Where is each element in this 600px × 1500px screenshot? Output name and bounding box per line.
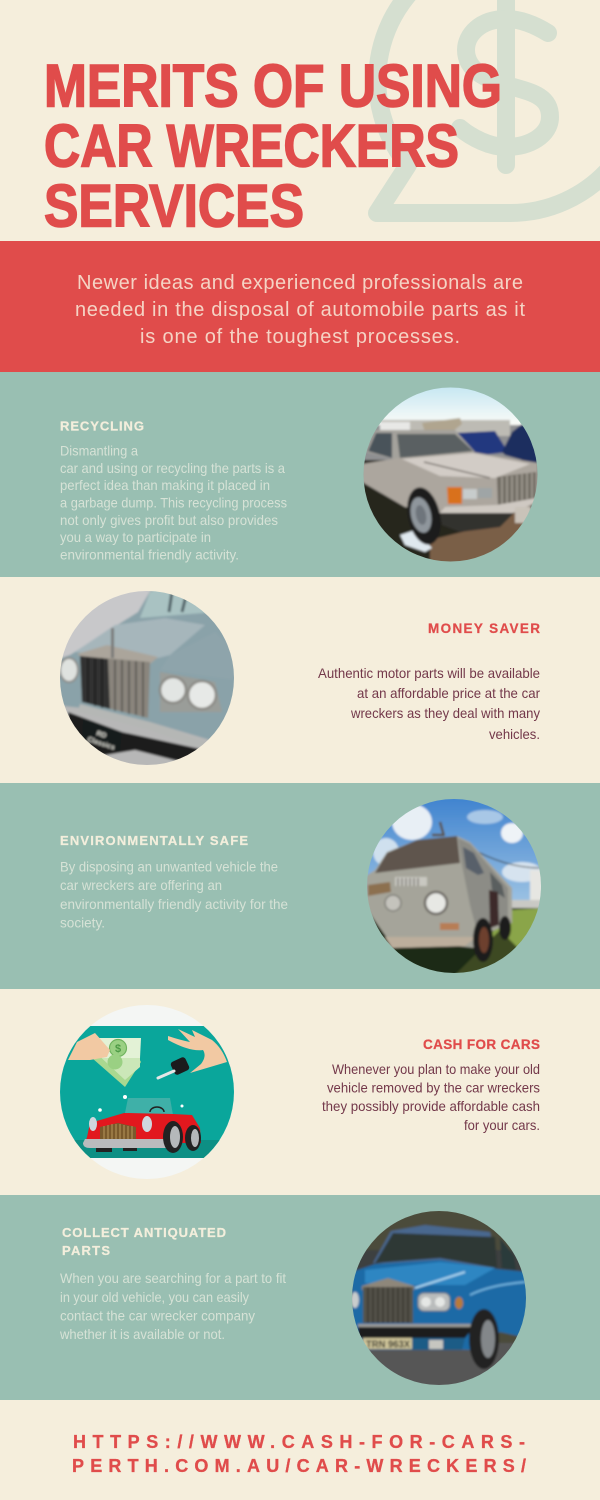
photo: silver car [360,385,540,565]
text: environmentally safe: environmentally friendly activity for the [60,896,288,912]
text: recycling: Dismantling a [60,443,138,459]
heading: environmentally safe: ENVIRONMENTALLY SAFE [60,833,248,848]
text: money saver: Authentic motor parts will be available [318,665,540,681]
text: environmentally safe: society. [60,915,105,931]
text: environmentally safe: By disposing an unwanted vehicle the [60,859,278,875]
heading: collect antiquated parts: PARTS [62,1243,110,1258]
title: MERITS OF USING [44,52,502,120]
text: cash for cars: vehicle removed by the car wreckers [327,1080,540,1096]
intro banner: Newer ideas and experienced professionals are [77,272,523,294]
intro banner [0,241,600,372]
title [44,52,502,240]
text: collect antiquated parts: in your old vehicle, you can easily [60,1289,249,1305]
text: collect antiquated parts: whether it is available or not. [59,1326,225,1342]
text: environmentally safe: car wreckers are offering an [60,877,222,893]
panel: environmentally safe [0,783,600,989]
intro banner: needed in the disposal of automobile parts as it [75,299,525,321]
title: CAR WRECKERS [44,112,459,180]
icon: red car [83,1095,201,1153]
heading: money saver: MONEY SAVER [428,621,540,636]
text: recycling: a garbage dump. This recycling process [60,495,287,511]
photo: blue car [350,1208,530,1388]
text: collect antiquated parts: contact the car wrecker company [60,1308,255,1324]
text: recycling: car and using or recycling the parts is a [60,460,285,476]
icon: banknotes: $ [115,1043,121,1055]
icon: banknotes [68,1033,141,1087]
heading: cash for cars: CASH FOR CARS [423,1037,540,1052]
photo: grey car grille: Classics [86,736,116,752]
text: collect antiquated parts [59,1270,286,1342]
text: cash for cars: Whenever you plan to make your old [332,1061,540,1077]
illustration: cash and keys for red car [60,1005,234,1179]
text: recycling: not only gives profit but also provides [60,512,278,528]
text: recycling: environmental friendly activity. [60,547,239,563]
text: recycling: you a way to participate in [60,529,211,545]
text: recycling: perfect idea than making it placed in [60,477,270,493]
title: SERVICES [44,172,304,240]
footer: website link: PERTH.COM.AU/CAR-WRECKERS/ [72,1456,526,1476]
panel: recycling [0,372,600,577]
text: cash for cars: for your cars. [464,1117,540,1133]
panel: cash for cars [60,1005,540,1179]
header panel [0,0,600,241]
intro banner: is one of the toughest processes. [140,326,460,348]
heading: collect antiquated parts [62,1225,226,1258]
footer: website link: HTTPS://WWW.CASH-FOR-CARS- [73,1432,525,1452]
panel: money saver [60,591,540,765]
photo: grey car grille [60,591,234,765]
text: money saver: vehicles. [489,726,540,742]
photo: grey car grille: RD [95,730,107,740]
heading: collect antiquated parts: COLLECT ANTIQUATED [62,1225,226,1240]
footer: website link [0,1400,600,1500]
heading: recycling: RECYCLING [60,418,144,434]
text: environmentally safe [60,859,288,931]
photo: blue car: TRN 963X [366,1340,410,1350]
panel: collect antiquated parts [0,1195,600,1400]
icon: dollar watermark [377,0,600,213]
text: money saver: wreckers as they deal with many [350,705,540,721]
text: money saver [318,665,540,742]
text: money saver: at an affordable price at the car [357,685,540,701]
icon: hand with key [158,1029,227,1078]
photo: old VW van [365,797,545,978]
text: cash for cars: they possibly provide affordable cash [322,1098,540,1114]
text: collect antiquated parts: When you are searching for a part to fit [60,1270,286,1286]
text: cash for cars [322,1061,540,1133]
text: recycling [60,443,287,563]
